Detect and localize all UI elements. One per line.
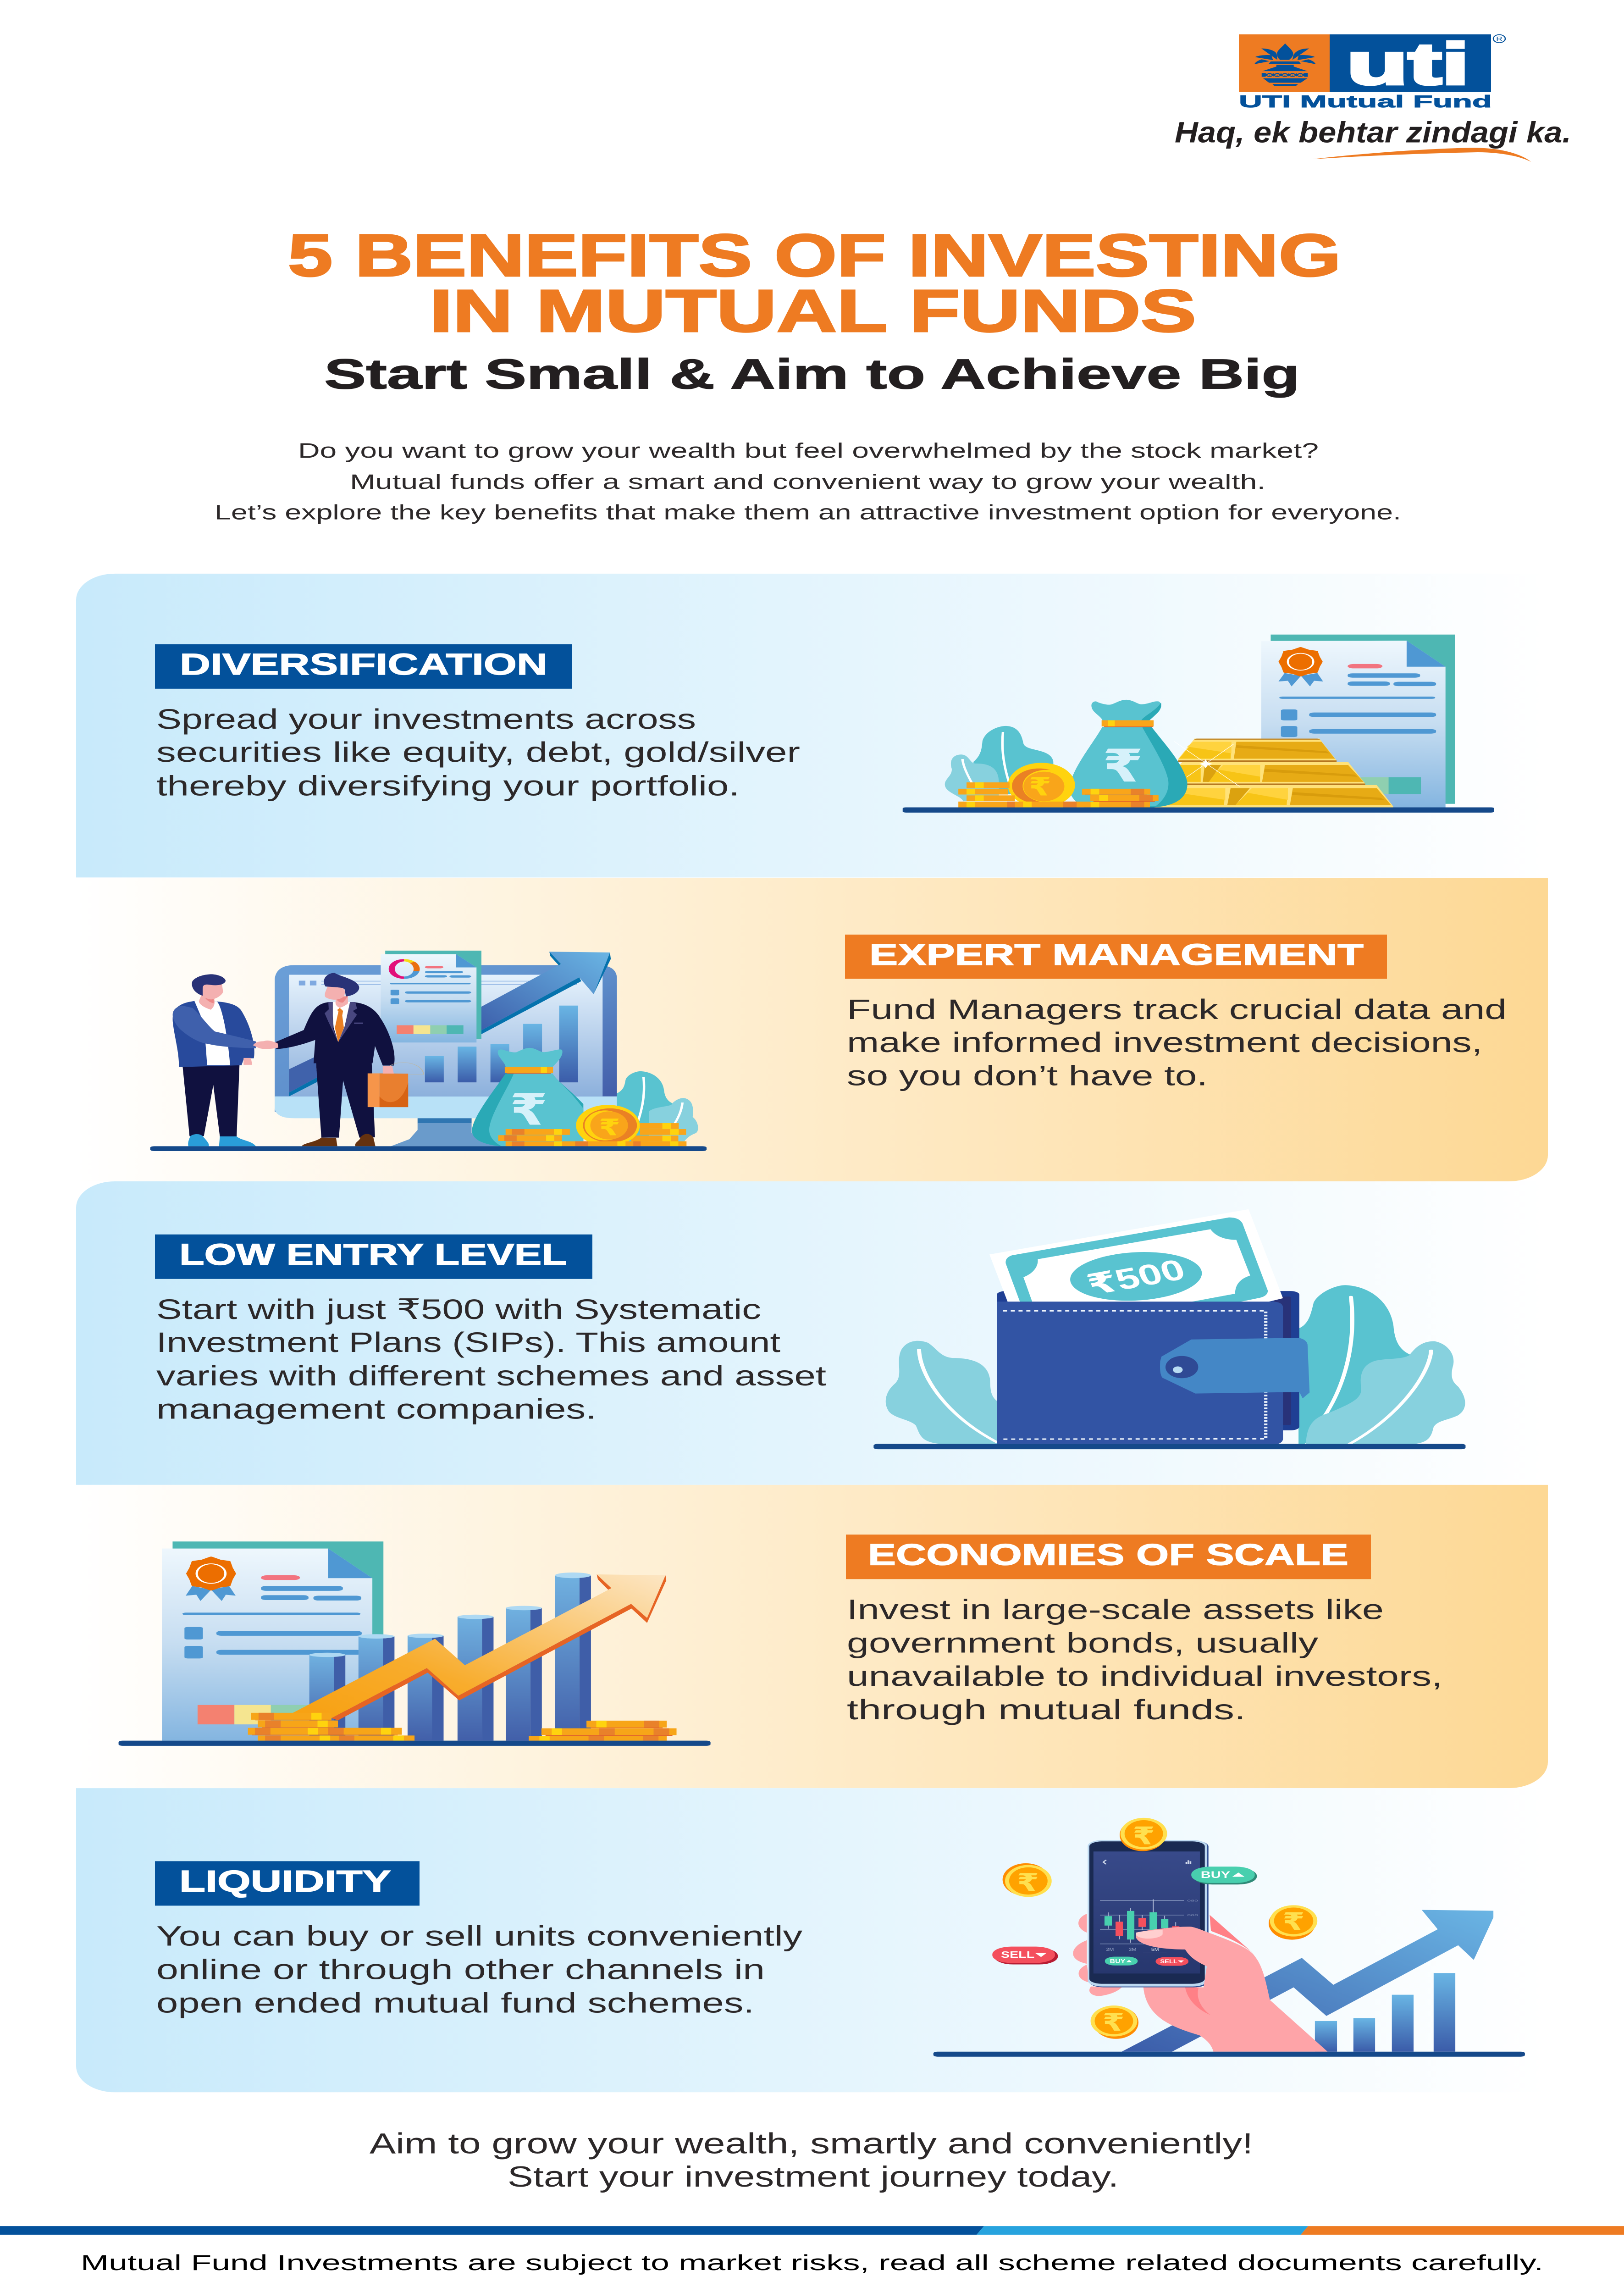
text block: diversification: thereby diversifying your portfolio.	[156, 770, 740, 802]
text block: diversification	[156, 703, 800, 802]
icon: sell button: SELL	[1001, 1950, 1034, 1960]
icon: coin bottom: ₹	[1102, 2008, 1125, 2036]
text block: low entry level	[156, 1293, 826, 1425]
icon: report document	[381, 951, 481, 1042]
icon: money bag	[1070, 700, 1188, 807]
panel: economies of scale	[76, 1485, 1548, 1788]
illustration: growth chart and certificate	[119, 1541, 711, 1746]
panel: diversification	[76, 574, 1548, 877]
heading: liquidity: LIQUIDITY	[179, 1865, 391, 1898]
closing message: Aim to grow your wealth, smartly and conveniently!	[370, 2127, 1253, 2160]
text block: low entry level: management companies.	[156, 1393, 597, 1425]
text block: expert management: make informed investment decisions,	[847, 1026, 1482, 1058]
icon: smartphone: 060	[1187, 1914, 1198, 1916]
icon: fund manager figure	[275, 973, 395, 1146]
illustration: handshake with monitor	[150, 951, 707, 1151]
text block: diversification: securities like equity, debt, gold/silver	[156, 736, 800, 768]
icon: plants	[617, 1071, 698, 1146]
icon: rupee coin and stacks: ₹	[599, 1115, 620, 1141]
text block: economies of scale: Invest in large-scale assets like	[847, 1593, 1384, 1625]
arrow: rising blue arrow	[475, 952, 611, 1038]
panel: liquidity	[76, 1788, 1548, 2092]
logo name: UTI Mutual Fund	[1239, 92, 1492, 111]
heading: economies of scale: ECONOMIES OF SCALE	[868, 1538, 1348, 1572]
shelf line	[934, 2052, 1525, 2057]
icon: plants	[886, 1285, 1412, 1444]
icon: certificate document	[1261, 635, 1455, 807]
icon: kalash pot	[1254, 43, 1316, 86]
bar chart: blue bars	[1315, 1973, 1455, 2052]
icon: wallet back	[997, 1291, 1299, 1430]
heading: low entry level	[155, 1235, 592, 1279]
panel 2 background	[76, 878, 1548, 1181]
panel 5 background	[76, 1788, 1548, 2092]
registered mark: R	[1496, 36, 1502, 42]
icon: fingers behind phone	[1073, 1914, 1253, 1996]
shelf line	[903, 807, 1494, 813]
icon: plants	[945, 726, 1053, 801]
logo blue block	[1330, 34, 1491, 92]
icon: shopping bag	[368, 1063, 424, 1107]
title	[288, 222, 1341, 344]
icon: gold bars	[1154, 738, 1393, 807]
icon: coin top	[1120, 1818, 1167, 1851]
text block: liquidity: online or through other channels in	[156, 1954, 765, 1985]
panel: expert management	[76, 878, 1548, 1181]
icon: coin top: ₹	[1133, 1822, 1155, 1850]
logo wordmark uti: uti	[1347, 32, 1469, 97]
panel 4 background	[76, 1485, 1548, 1788]
icon: buy button: BUY	[1201, 1869, 1230, 1880]
text block: expert management: Fund Managers track crucial data and	[847, 993, 1507, 1025]
icon: handshake	[253, 1041, 278, 1049]
illustration: phone trading with hand	[934, 1818, 1525, 2057]
icon: rupee note: ₹500	[1082, 1253, 1190, 1301]
icon: coin right: ₹	[1282, 1908, 1305, 1935]
closing message	[370, 2127, 1253, 2193]
icon: rupee coin and stacks	[958, 763, 1159, 807]
icon: coin bottom	[1091, 2005, 1138, 2039]
text block: low entry level: Investment Plans (SIPs). This amount	[156, 1326, 780, 1358]
icon: smartphone: SELL	[1160, 1958, 1177, 1965]
panel 3 background	[76, 1181, 1548, 1485]
text block: expert management: so you don’t have to.	[847, 1060, 1208, 1091]
text block: diversification: Spread your investments across	[156, 703, 696, 735]
text block: economies of scale: government bonds, usually	[847, 1627, 1318, 1659]
heading: liquidity	[155, 1861, 420, 1905]
icon: front plant	[1306, 1341, 1465, 1444]
text block: economies of scale: unavailable to individual investors,	[847, 1660, 1442, 1692]
illustration: money bag, gold bars and certificate	[903, 635, 1494, 813]
icon: investor figure	[173, 974, 256, 1146]
icon: hand	[1136, 1927, 1328, 2052]
arrow: rising blue arrow	[1121, 1910, 1493, 2052]
icon: coin stacks	[248, 1713, 677, 1741]
icon: coin right	[1269, 1905, 1317, 1940]
registered mark	[1493, 35, 1505, 43]
logo: UTI Mutual Fund	[1175, 32, 1571, 162]
icon: monitor	[275, 965, 617, 1146]
icon: wallet front	[997, 1302, 1309, 1444]
heading: low entry level: LOW ENTRY LEVEL	[179, 1238, 567, 1271]
subtitle: Start Small & Aim to Achieve Big	[324, 350, 1300, 398]
icon: rupee coin and stacks	[498, 1105, 686, 1146]
arrow: rising orange arrow	[293, 1574, 666, 1720]
icon: buy button	[1191, 1867, 1257, 1884]
title: IN MUTUAL FUNDS	[430, 278, 1196, 344]
icon: money bag: ₹	[1102, 741, 1143, 791]
text block: economies of scale: through mutual funds.	[847, 1694, 1246, 1726]
closing message: Start your investment journey today.	[508, 2160, 1119, 2193]
icon: coin left	[1003, 1863, 1052, 1897]
intro text: Do you want to grow your wealth but feel overwhelmed by the stock market?	[298, 439, 1319, 462]
intro text: Mutual funds offer a smart and convenient way to grow your wealth.	[350, 471, 1265, 493]
title: 5 BENEFITS OF INVESTING	[288, 222, 1341, 289]
shelf line	[150, 1146, 707, 1151]
panel 1 background	[76, 574, 1548, 877]
intro text: Let’s explore the key benefits that make them an attractive investment option for everyone.	[215, 501, 1401, 524]
icon: sell button	[992, 1947, 1058, 1965]
text block: economies of scale	[847, 1593, 1442, 1726]
tagline swoosh	[1312, 148, 1531, 162]
icon: money bag: ₹	[510, 1085, 548, 1134]
icon: smartphone	[1088, 1840, 1209, 1987]
icon: smartphone: 080	[1187, 1900, 1198, 1902]
text block: liquidity: open ended mutual fund schemes.	[156, 1987, 754, 2019]
disclaimer: Mutual Fund Investments are subject to market risks, read all scheme related documents carefully.	[81, 2250, 1543, 2275]
icon: rupee note	[989, 1209, 1283, 1309]
heading: diversification: DIVERSIFICATION	[180, 648, 547, 681]
icon: money bag	[472, 1048, 583, 1146]
bar chart: cylinders	[309, 1573, 591, 1741]
icon: coin left: ₹	[1017, 1869, 1039, 1896]
icon: smartphone: 3M	[1129, 1947, 1137, 1952]
footer colour bar	[0, 2226, 1624, 2235]
text block: low entry level: varies with different schemes and asset	[156, 1360, 826, 1391]
text block: liquidity	[156, 1920, 802, 2019]
intro text	[215, 439, 1401, 524]
heading: expert management: EXPERT MANAGEMENT	[869, 938, 1364, 971]
logo orange block	[1239, 34, 1330, 92]
panel: low entry level	[76, 1181, 1548, 1485]
shelf line	[873, 1444, 1465, 1449]
icon: smartphone: 2M	[1106, 1947, 1114, 1952]
icon: smartphone: 5M	[1151, 1947, 1159, 1952]
text block: low entry level: Start with just ₹500 with Systematic	[156, 1293, 761, 1325]
text block: expert management	[847, 993, 1507, 1091]
illustration: wallet with 500 rupee note	[873, 1209, 1465, 1449]
icon: rupee coin and stacks: ₹	[1029, 773, 1051, 801]
icon: smartphone: BUY	[1110, 1958, 1126, 1964]
shelf line	[119, 1741, 711, 1746]
icon: certificate document	[162, 1541, 383, 1741]
text block: liquidity: You can buy or sell units conveniently	[156, 1920, 802, 1952]
